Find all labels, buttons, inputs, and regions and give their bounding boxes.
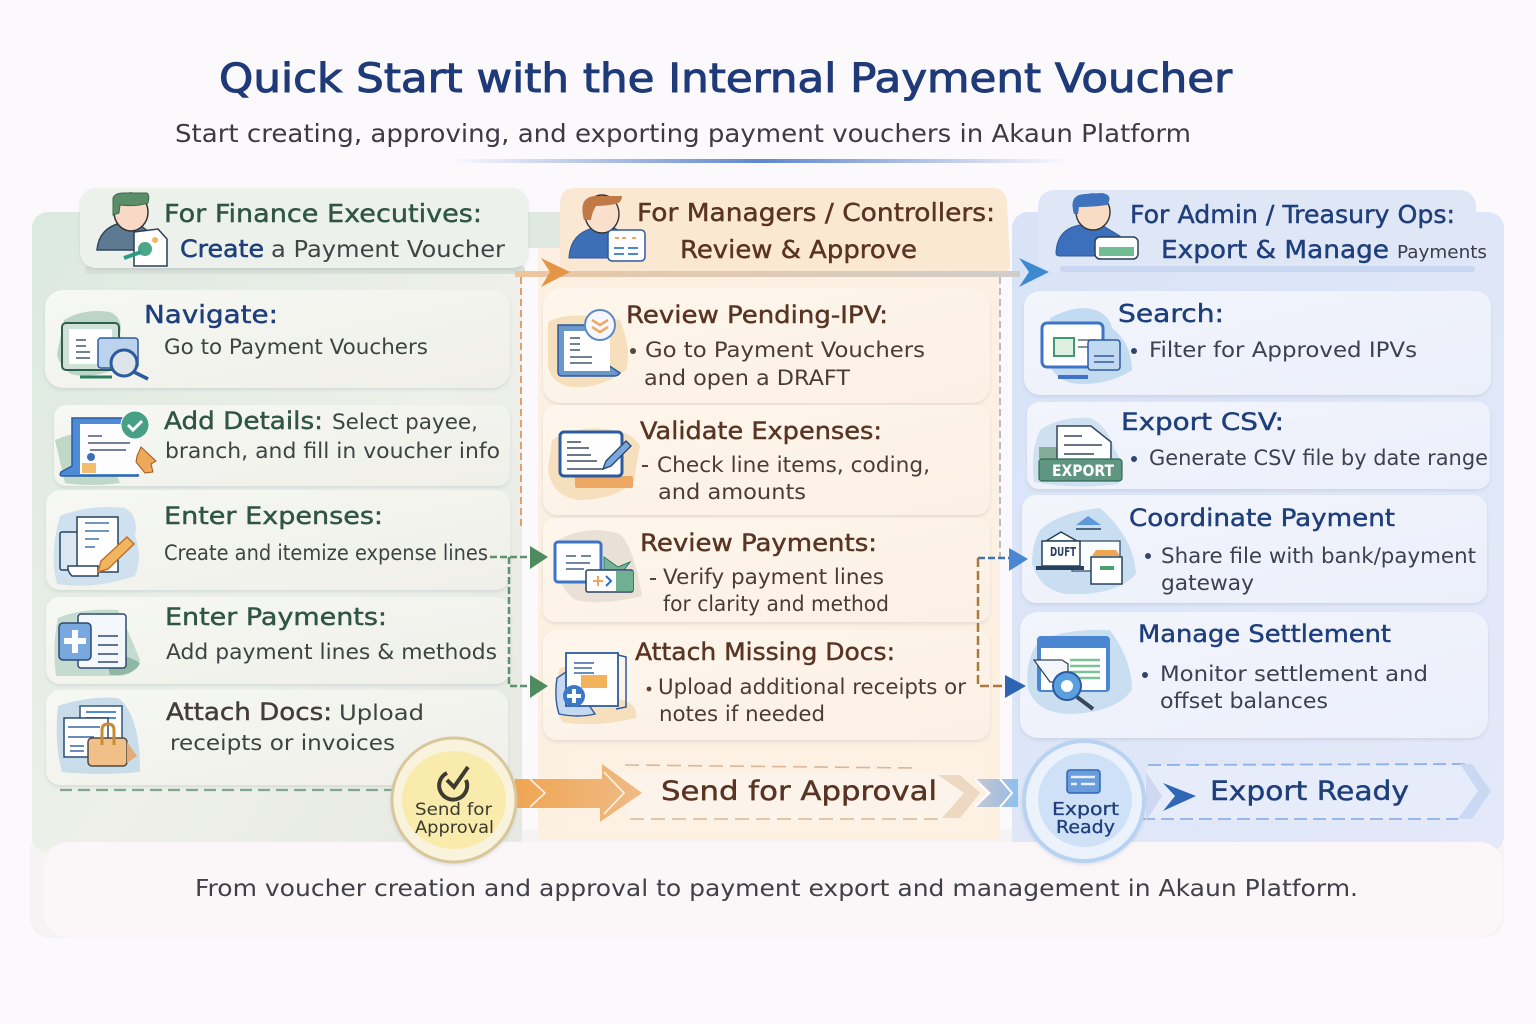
banner: send for approval [567, 747, 987, 835]
icon: validate form and pen [548, 428, 640, 500]
header subtitle: export and manage: Payments [1397, 242, 1487, 263]
step text: manage settlement [1142, 662, 1428, 713]
arrowhead: attach missing docs [530, 675, 548, 698]
step text: coordinate payment: gateway [1161, 571, 1254, 595]
card: review pending [543, 288, 990, 403]
step title: search: Search: [1118, 299, 1224, 328]
connector: managers to admin vertical [999, 277, 1001, 558]
header: managers [560, 188, 1010, 272]
header subtitle: export and manage [1161, 235, 1487, 264]
icon: settlement window with magnifier [1027, 630, 1132, 714]
header title: admin: For Admin / Treasury Ops: [1130, 200, 1455, 229]
card: attach docs [46, 690, 508, 785]
step title: export csv: Export CSV: [1121, 408, 1284, 436]
arrow: chevrons to export ready [975, 779, 1018, 807]
step text: attach docs [170, 701, 424, 755]
connector: finance to approval vertical [520, 277, 522, 530]
badge text: Approval [415, 818, 494, 838]
step text: review payments: Verify payment lines [663, 565, 884, 589]
icon: search monitor [1042, 308, 1132, 384]
step text: attach missing docs: Upload additional receipts or [658, 675, 966, 699]
icon: admin person [1056, 193, 1138, 259]
card: validate expenses [543, 405, 990, 515]
icon: manager person [569, 195, 645, 261]
badge text [415, 800, 494, 838]
icon: payment window [555, 530, 642, 602]
connector: dashed line to send for approval [60, 789, 392, 791]
arrow: top flow line [515, 258, 1049, 287]
icon: voucher form with check [55, 411, 156, 485]
step text: review payments: for clarity and method [663, 592, 889, 616]
icon: bank and file: DUFT [1050, 545, 1077, 559]
card: search [1024, 291, 1491, 395]
badge text: Export [1052, 799, 1119, 820]
icon: bank and file [1032, 508, 1136, 594]
badge text: Send for [415, 800, 492, 820]
badge: send for approval [392, 738, 516, 862]
subtitle: Start creating, approving, and exporting payment vouchers in Akaun Platform [175, 119, 1191, 148]
header: finance executives [80, 188, 528, 268]
step text: validate expenses: and amounts [658, 480, 806, 504]
icon: card [1067, 770, 1100, 793]
step text: review pending: and open a DRAFT [644, 366, 850, 390]
banner: send for approval: Send for Approval [661, 776, 937, 807]
chevron: blue [1019, 258, 1049, 287]
step text: manage settlement: Monitor settlement and [1160, 662, 1428, 686]
arrowhead: manage settlement [1005, 675, 1026, 698]
arrow: enter expenses to review payments [490, 546, 548, 698]
step text: export csv: Generate CSV file by date range [1149, 446, 1488, 470]
icon: export csv [1033, 418, 1122, 487]
icon: pending doc [548, 310, 628, 387]
icon: check ring [439, 767, 468, 800]
panel: finance executives column [32, 188, 566, 852]
step text: review pending [630, 338, 925, 390]
icon: monitor and magnifier [57, 311, 148, 379]
badge text: Ready [1056, 817, 1115, 838]
card: add details [54, 405, 510, 486]
panel: managers column [538, 188, 1010, 840]
title: Quick Start with the Internal Payment Voucher [219, 56, 1233, 102]
step text: navigate: Go to Payment Vouchers [164, 335, 428, 359]
footer text: From voucher creation and approval to payment export and management in Akaun Platform. [195, 876, 1358, 902]
icon: attach missing [555, 653, 636, 724]
step text: attach missing docs: notes if needed [659, 702, 825, 726]
header subtitle: export and manage: Export & Manage [1161, 235, 1389, 264]
step text: coordinate payment: Share file with bank/payment [1161, 544, 1476, 568]
card: review payments [543, 518, 990, 622]
step text: search: Filter for Approved IPVs [1149, 338, 1417, 362]
step title: enter payments: Enter Payments: [165, 603, 387, 631]
step text: validate expenses [642, 453, 930, 504]
arrow: big orange arrow to send for approval [515, 764, 642, 822]
step text: enter payments: Add payment lines & methods [166, 640, 497, 664]
step title: enter expenses: Enter Expenses: [164, 502, 383, 530]
step title: manage settlement: Manage Settlement [1138, 620, 1391, 648]
header subtitle: review and approve: Review & Approve [680, 235, 917, 264]
step text: enter expenses: Create and itemize expense lines [164, 541, 488, 565]
icon: finance person [97, 193, 167, 266]
card: enter expenses [46, 490, 510, 590]
step title: attach missing docs: Attach Missing Docs: [635, 638, 895, 666]
step text: add details [165, 410, 500, 463]
header subtitle: create: a Payment Voucher [271, 237, 506, 263]
badge: export ready [1024, 741, 1144, 861]
icon: attachments [57, 698, 140, 774]
step title: review pending: Review Pending-IPV: [626, 301, 888, 329]
step text: review pending: Go to Payment Vouchers [645, 338, 925, 362]
step title: validate expenses: Validate Expenses: [640, 417, 882, 445]
card: coordinate payment [1022, 495, 1487, 603]
lower backdrop behind footer [30, 830, 1504, 938]
card: enter payments [46, 597, 510, 684]
panel: admin column [1012, 190, 1504, 852]
icon: export csv: EXPORT [1052, 461, 1114, 480]
card: attach missing docs [543, 630, 990, 740]
step text: manage settlement: offset balances [1160, 689, 1328, 713]
step text: attach docs: receipts or invoices [170, 731, 395, 755]
step text: add details: Select payee, [332, 410, 478, 434]
arrow: managers to admin steps [978, 548, 1028, 698]
step title: coordinate payment: Coordinate Payment [1129, 504, 1395, 532]
step title: navigate: Navigate: [144, 300, 278, 329]
step title: add details: Add Details: [164, 407, 323, 435]
badge text [1052, 799, 1119, 838]
card: navigate [45, 290, 510, 388]
icon: documents with pencil [54, 507, 139, 586]
step text: attach missing docs [647, 675, 966, 726]
step text: add details: branch, and fill in voucher info [165, 439, 500, 463]
step title: review payments: Review Payments: [640, 529, 877, 557]
step text: coordinate payment [1145, 544, 1476, 595]
header title: finance: For Finance Executives: [164, 199, 482, 228]
step text: validate expenses: Check line items, coding, [657, 453, 930, 477]
card: export csv [1027, 402, 1490, 489]
step text: attach docs: Upload [339, 701, 424, 725]
banner: export ready: Export Ready [1210, 776, 1409, 807]
card: manage settlement [1020, 612, 1488, 738]
header: admin [1038, 190, 1487, 272]
footer panel [44, 842, 1503, 937]
step text: review payments [650, 565, 889, 616]
chevron: orange [541, 258, 570, 287]
header subtitle: create: Create [180, 235, 264, 263]
header title: managers: For Managers / Controllers: [637, 198, 995, 227]
step title: attach docs: Attach Docs: [166, 698, 332, 726]
banner: export ready [1140, 764, 1491, 821]
icon: payment plus form [54, 610, 140, 676]
header subtitle: create [180, 235, 506, 263]
chevron: export ready [1163, 783, 1196, 811]
